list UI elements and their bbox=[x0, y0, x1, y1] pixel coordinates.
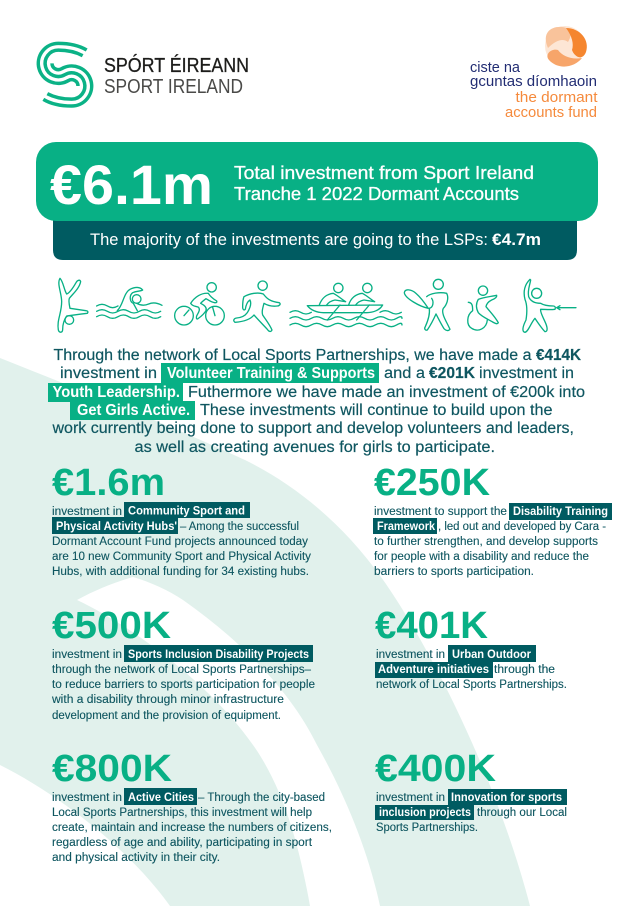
stat: 800K active cities: create, maintain and increase the numbers of citizens, bbox=[52, 822, 332, 834]
stat: 500K sports inclusion: investment in bbox=[52, 649, 122, 661]
intro text block: as well as creating avenues for girls to participate. bbox=[134, 439, 495, 456]
stat: 500K sports inclusion: to reduce barriers to sports participation for people bbox=[52, 679, 315, 691]
icon: orange knot bbox=[545, 26, 587, 67]
stat: 800K active cities bbox=[52, 748, 332, 864]
logo: Sport Ireland bbox=[38, 43, 249, 106]
stat: 800K active cities: – Through the city-based bbox=[198, 792, 325, 804]
stat: 500K sports inclusion: with a disability through minor infrastructure bbox=[51, 694, 284, 706]
intro text block: and a bbox=[384, 365, 425, 382]
background swirl bbox=[0, 358, 530, 906]
logo: dormant accounts fund bbox=[470, 26, 598, 121]
stat: 1.6m community hubs: Hubs, with additional funding for 34 existing hubs. bbox=[52, 566, 309, 578]
stat: 500K sports inclusion: development and the provision of equipment. bbox=[52, 710, 281, 722]
wordmark lines bbox=[470, 59, 598, 121]
stat: 401K urban outdoor: Urban Outdoor bbox=[452, 649, 531, 661]
intro text block: Futhermore we have made an investment of €200k into bbox=[188, 384, 585, 401]
stat: 1.6m community hubs: – Among the successful bbox=[180, 521, 299, 533]
intro text block: investment in bbox=[479, 365, 574, 382]
stat: 401K urban outdoor: €401K bbox=[375, 605, 489, 647]
panel: total investment bbox=[36, 142, 598, 221]
wordmark bbox=[104, 54, 249, 98]
icon: runner bbox=[234, 281, 280, 331]
stat: 1.6m community hubs: Physical Activity Hubs' bbox=[56, 521, 177, 533]
panel: LSP banner: €4.7m bbox=[492, 231, 541, 249]
stat: 800K active cities: regardless of age and ability, participating in sport bbox=[52, 837, 313, 849]
panel: total investment: Total investment from Sport Ireland bbox=[234, 162, 534, 183]
icon: wheelchair athlete bbox=[468, 286, 498, 330]
stat: 400K innovation: investment in bbox=[376, 792, 445, 804]
intro text block: These investments will continue to build upon the bbox=[200, 402, 552, 419]
stat: 500K sports inclusion: Sports Inclusion Disability Projects bbox=[128, 649, 309, 661]
stat: 250K disability training: Framework bbox=[377, 521, 436, 533]
intro text block bbox=[48, 347, 585, 456]
stat: 1.6m community hubs: are 10 new Community Sport and Physical Activity bbox=[52, 551, 311, 563]
highlight: youth leadership: Youth Leadership. bbox=[52, 384, 180, 401]
stat: 1.6m community hubs: Dormant Account Fund projects announced today bbox=[52, 536, 308, 548]
icon: cyclist bbox=[175, 283, 224, 325]
stat: 401K urban outdoor: investment in bbox=[376, 649, 445, 661]
intro text block: investment in bbox=[60, 365, 157, 382]
stat: 1.6m community hubs bbox=[52, 462, 311, 578]
wordmark: SPORT IRELAND bbox=[104, 76, 243, 98]
stat: 500K sports inclusion: through the network of Local Sports Partnerships– bbox=[52, 664, 312, 676]
stat: 800K active cities: and physical activity in their city. bbox=[52, 852, 220, 864]
stat: 400K innovation: inclusion projects bbox=[379, 807, 471, 819]
wordmark: SPÓRT ÉIREANN bbox=[104, 54, 249, 77]
wordmark lines: the dormant bbox=[516, 89, 598, 106]
stat: 250K disability training: €250K bbox=[374, 462, 491, 504]
intro text block: work currently being done to support and develop volunteers and leaders, bbox=[51, 420, 574, 437]
wordmark lines: gcuntas díomhaoin bbox=[470, 73, 597, 90]
stat: 400K innovation: Innovation for sports bbox=[451, 792, 562, 804]
stat: 401K urban outdoor bbox=[375, 605, 567, 691]
stat: 500K sports inclusion: €500K bbox=[52, 605, 172, 647]
stat: 500K sports inclusion bbox=[51, 605, 315, 722]
icon: rowers bbox=[290, 283, 402, 327]
stat: 1.6m community hubs: investment in bbox=[52, 506, 122, 518]
panel: total investment: Tranche 1 2022 Dormant Accounts bbox=[234, 183, 519, 204]
stat: 400K innovation: through our Local bbox=[477, 807, 567, 819]
icon: fencer bbox=[523, 279, 576, 332]
stat: 800K active cities: Active Cities bbox=[128, 792, 194, 804]
intro text block: €414K bbox=[536, 347, 582, 364]
stat: 250K disability training: Disability Training bbox=[513, 506, 608, 518]
stat: 250K disability training bbox=[373, 462, 612, 578]
stat: 401K urban outdoor: Adventure initiatives bbox=[378, 664, 489, 676]
stat: 401K urban outdoor: through the bbox=[494, 664, 555, 676]
panel: total investment: €6.1m bbox=[50, 153, 213, 216]
stat: 1.6m community hubs: €1.6m bbox=[52, 462, 165, 504]
stat: 250K disability training: , led out and developed by Cara - bbox=[438, 521, 606, 533]
stat: 400K innovation: €400K bbox=[375, 748, 497, 790]
stat: 250K disability training: to further strengthen, and develop supports bbox=[374, 536, 598, 548]
intro text block: Through the network of Local Sports Partnerships, we have made a bbox=[54, 347, 532, 364]
icon: swimmer bbox=[97, 287, 162, 318]
stat: 1.6m community hubs: Community Sport and bbox=[128, 506, 245, 518]
icons: sports row bbox=[58, 278, 576, 332]
icon: hurler bbox=[404, 279, 450, 331]
icon: gymnast bbox=[58, 278, 88, 332]
stat: 250K disability training: for people with a disability and reduce the bbox=[374, 551, 589, 563]
stat: 400K innovation bbox=[375, 748, 567, 834]
stat: 401K urban outdoor: network of Local Sports Partnerships. bbox=[376, 679, 567, 691]
stat: 250K disability training: barriers to sports participation. bbox=[374, 566, 534, 578]
stat: 800K active cities: investment in bbox=[52, 792, 122, 804]
stat: 400K innovation: Sports Partnerships. bbox=[376, 822, 478, 834]
wordmark lines: accounts fund bbox=[505, 104, 597, 121]
stat: 250K disability training: investment to support the bbox=[374, 506, 507, 518]
intro text block: €201K bbox=[429, 365, 476, 382]
highlight: get girls active: Get Girls Active. bbox=[77, 402, 190, 419]
icon: spiral mark bbox=[38, 43, 92, 106]
stat: 800K active cities: €800K bbox=[52, 748, 173, 790]
panel: LSP banner bbox=[53, 215, 577, 260]
wordmark lines: ciste na bbox=[470, 59, 521, 76]
stat: 800K active cities: Local Sports Partnerships, this investment will help bbox=[52, 807, 312, 819]
panel: LSP banner: The majority of the investments are going to the LSPs: bbox=[90, 231, 488, 249]
highlight: volunteer training: Volunteer Training & Supports bbox=[167, 365, 375, 382]
